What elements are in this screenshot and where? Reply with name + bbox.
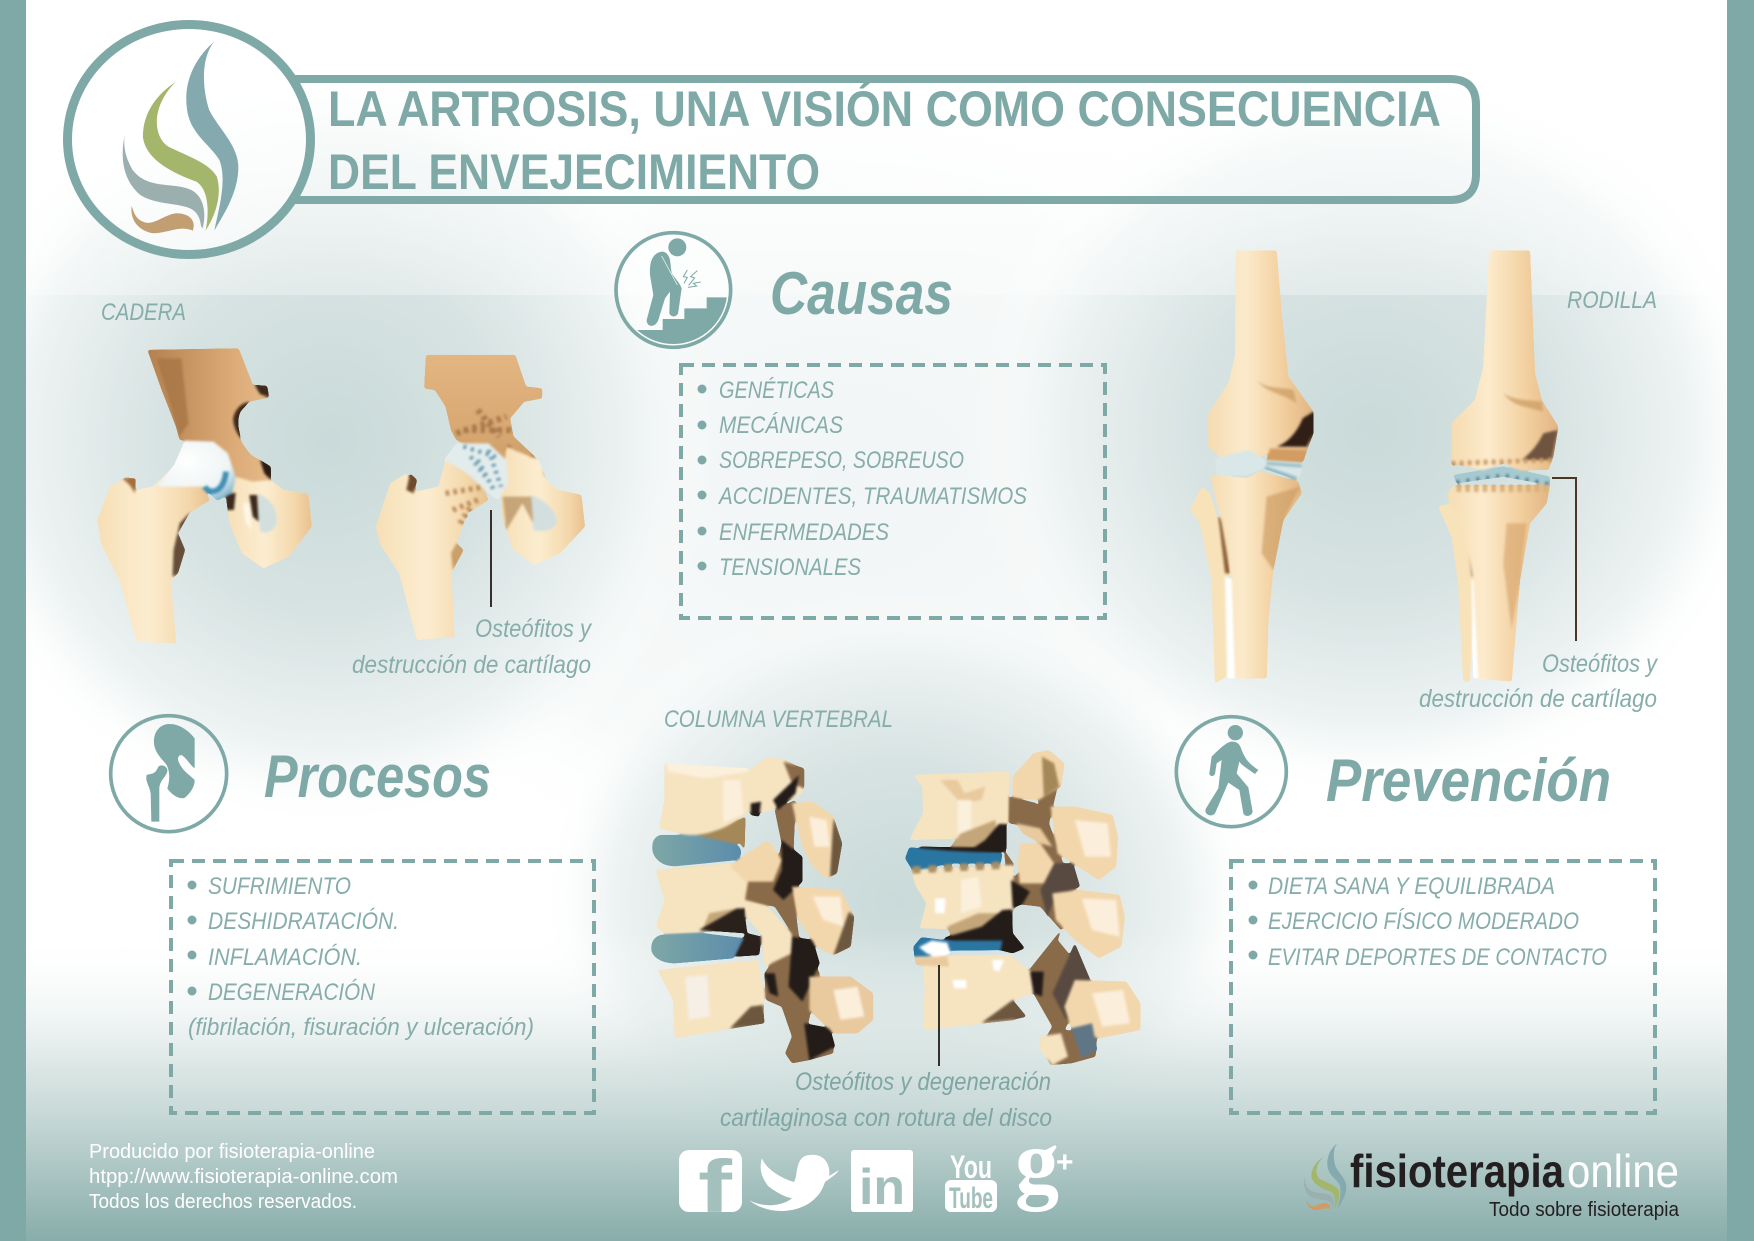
icon: google plus: + <box>1056 1146 1074 1179</box>
footer credits: htpp://www.fisioterapia-online.com <box>89 1166 398 1188</box>
icon: linkedin <box>851 1150 913 1215</box>
panel: prevención: EVITAR DEPORTES DE CONTACTO <box>1268 944 1607 971</box>
callout: knee osteophytes <box>1419 478 1658 713</box>
panel: procesos: (fibrilación, fisuración y ulceración) <box>188 1014 534 1041</box>
section: prevención heading <box>1176 717 1611 827</box>
callout: spine osteophytes <box>720 965 1052 1132</box>
label: columna vertebral: COLUMNA VERTEBRAL <box>664 706 893 733</box>
panel: procesos: INFLAMACIÓN. <box>208 944 362 971</box>
illustration: knee with arthrosis <box>1438 251 1558 682</box>
icon: facebook: f <box>698 1145 732 1228</box>
callout: knee osteophytes: Osteófitos y <box>1542 650 1658 678</box>
icon: linkedin: in <box>859 1159 905 1215</box>
illustration: healthy hip <box>97 348 312 643</box>
panel: causas <box>681 365 1105 618</box>
illustration: healthy spine <box>651 757 873 1063</box>
section: causas heading <box>616 233 953 353</box>
illustration: healthy knee <box>1190 251 1313 683</box>
title text: LA ARTROSIS, UNA VISIÓN COMO CONSECUENCIA <box>328 81 1441 137</box>
panel: prevención: EJERCICIO FÍSICO MODERADO <box>1268 908 1579 935</box>
illustration: degenerated spine <box>905 750 1140 1065</box>
brand logo <box>1304 1143 1680 1221</box>
icon: facebook <box>679 1145 742 1228</box>
panel: procesos: SUFRIMIENTO <box>208 873 351 900</box>
logo badge with flame <box>68 24 310 254</box>
label: rodilla: RODILLA <box>1567 287 1657 314</box>
icon: person with knee pain on stairs <box>616 233 733 353</box>
panel: causas: GENÉTICAS <box>719 377 834 404</box>
panel: causas: ACCIDENTES, TRAUMATISMOS <box>717 483 1027 510</box>
section: procesos heading <box>111 716 491 832</box>
icon: small flame <box>1304 1143 1346 1210</box>
callout: hip osteophytes: destrucción de cartílago <box>352 651 591 679</box>
panel: prevención <box>1231 861 1655 1113</box>
callout: hip osteophytes: Osteófitos y <box>475 615 592 643</box>
heading: Procesos <box>264 743 491 810</box>
icon: flame logo <box>123 42 238 233</box>
heading: Prevención <box>1326 747 1611 814</box>
footer credits <box>89 1141 398 1213</box>
icon: google plus: g <box>1015 1111 1059 1212</box>
illustration: hip with arthrosis <box>376 355 585 640</box>
icon: youtube: Tube <box>949 1182 993 1215</box>
brand logo: Todo sobre fisioterapia <box>1489 1199 1680 1221</box>
title banner <box>292 79 1476 200</box>
brand logo: online <box>1567 1145 1679 1197</box>
panel: procesos <box>171 861 594 1113</box>
callout: spine osteophytes: cartilaginosa con rotura del disco <box>720 1104 1052 1132</box>
callout: knee osteophytes: destrucción de cartílago <box>1419 685 1657 713</box>
footer credits: Producido por fisioterapia-online <box>89 1141 375 1163</box>
icon: youtube: You <box>950 1149 992 1185</box>
title text <box>328 81 1441 200</box>
icon: youtube <box>945 1149 997 1215</box>
panel: causas: MECÁNICAS <box>719 412 843 439</box>
panel: causas: SOBREPESO, SOBREUSO <box>719 447 964 474</box>
social icons <box>679 1111 1074 1228</box>
panel: procesos: DEGENERACIÓN <box>208 979 376 1006</box>
heading: Causas <box>770 260 953 327</box>
icon: twitter <box>749 1155 839 1211</box>
icon: walking person <box>1176 717 1286 827</box>
wordmark: fisioterapia <box>1350 1145 1564 1197</box>
panel: causas: TENSIONALES <box>719 554 861 581</box>
title text: DEL ENVEJECIMIENTO <box>328 144 820 200</box>
label: cadera: CADERA <box>101 299 186 326</box>
panel: prevención: DIETA SANA Y EQUILIBRADA <box>1268 873 1555 900</box>
icon: hip joint <box>111 716 227 832</box>
panel: causas: ENFERMEDADES <box>719 519 889 546</box>
callout: hip osteophytes <box>352 510 592 679</box>
footer credits: Todos los derechos reservados. <box>89 1191 357 1213</box>
panel: procesos: DESHIDRATACIÓN. <box>208 908 399 935</box>
callout: spine osteophytes: Osteófitos y degeneración <box>795 1068 1051 1096</box>
